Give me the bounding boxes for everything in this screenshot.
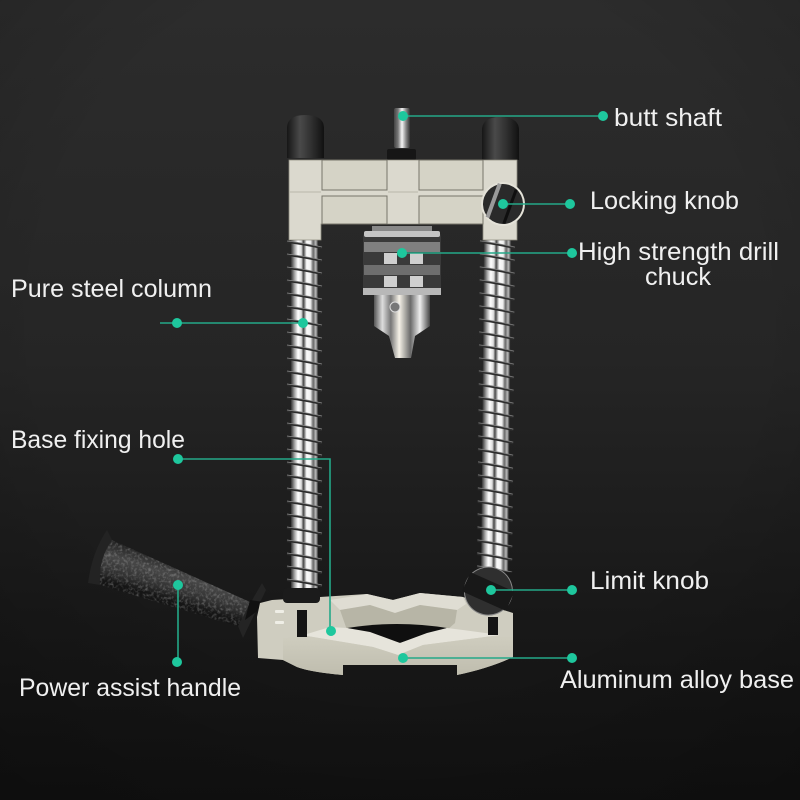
aluminum top frame [289,160,517,240]
callout: base fixing hole [11,426,336,636]
callout: power assist handle [19,580,241,702]
callout: butt shaft [398,104,722,132]
callout: base fixing hole: Base fixing hole [11,426,185,454]
butt shaft [387,108,416,160]
power assist handle [88,530,266,638]
callout: butt shaft: butt shaft [614,104,722,132]
callout: aluminum alloy base: Aluminum alloy base [560,666,794,694]
callout: high strength drill chuck: chuck [645,263,712,291]
locking knob [475,176,531,232]
callout: pure steel column [11,275,308,328]
left rubber cap [287,115,324,158]
right steel column [476,240,517,572]
callout: pure steel column: Pure steel column [11,275,212,303]
callout: locking knob [498,187,739,215]
callout: locking knob: Locking knob [590,187,739,215]
callout: aluminum alloy base [398,653,794,694]
callout: power assist handle: Power assist handle [19,674,241,702]
aluminum alloy base [257,588,513,675]
callout: limit knob [486,567,709,595]
drill chuck [363,226,441,358]
limit knob [457,559,520,623]
callout: high strength drill chuck: High strength drill [578,238,779,266]
callout: high strength drill chuck [397,238,779,291]
callout: limit knob: Limit knob [590,567,709,595]
right rubber cap [482,117,519,160]
left steel column [286,240,324,590]
